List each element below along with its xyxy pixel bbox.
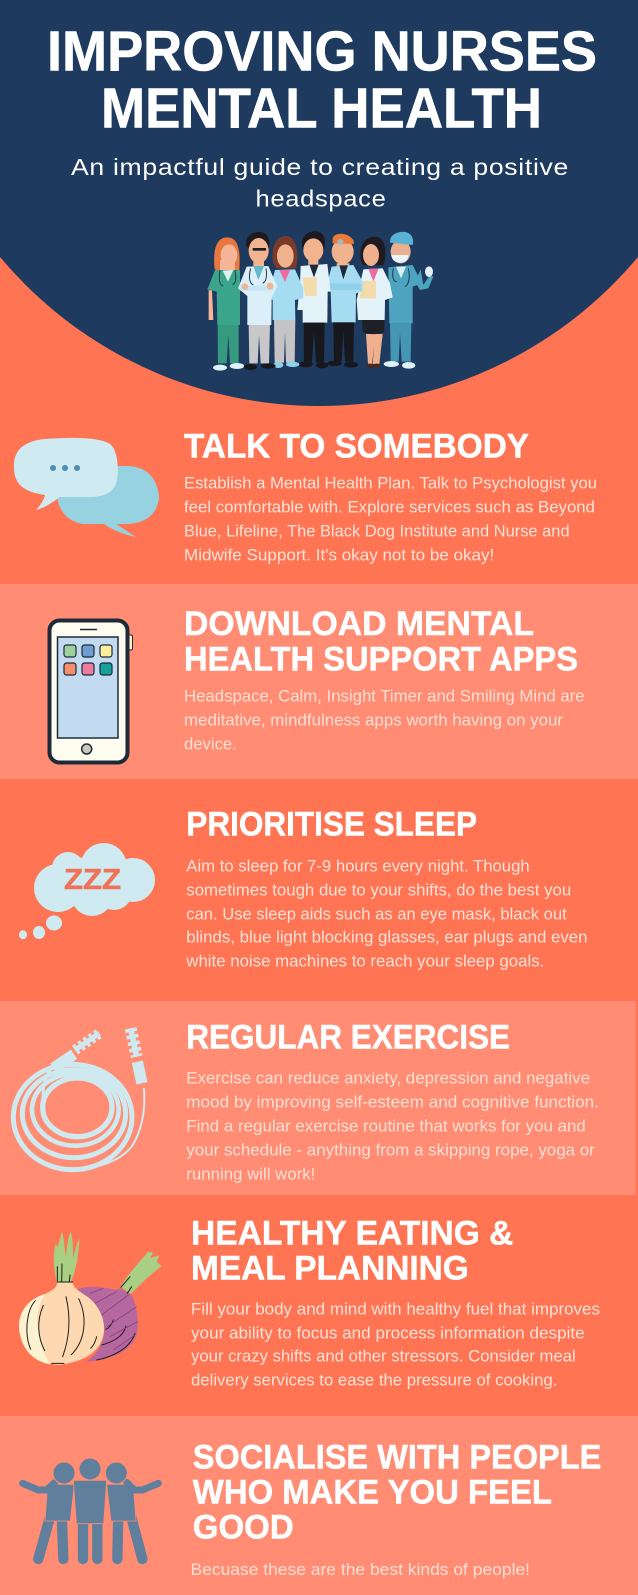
body text: Aim to sleep for 7-9 hours every night. Though	[186, 858, 530, 876]
body text: Establish a Mental Health Plan. Talk to Psychologist you	[184, 474, 597, 492]
panel: prioritise sleep	[19, 806, 588, 971]
icon detail: right handle	[131, 1028, 142, 1083]
icon detail: arms	[23, 1482, 158, 1490]
heading: HEALTH SUPPORT APPS	[184, 641, 578, 679]
icon detail: legs	[38, 1513, 142, 1559]
figure: woman with dark hair in skirt	[357, 237, 393, 368]
body text: your ability to focus and process information despite	[191, 1324, 585, 1342]
body text: Midwife Support. It's okay not to be okay!	[184, 546, 494, 564]
icon: three people embracing	[23, 1458, 158, 1559]
figure: man with head mirror	[326, 234, 363, 368]
heading	[184, 605, 578, 679]
body text: your crazy shifts and other stressors. Consider meal	[191, 1348, 576, 1366]
body text: blinds, blue light blocking glasses, ear plugs and even	[186, 929, 588, 947]
subtitle	[71, 154, 569, 212]
navy circle background	[0, 0, 638, 406]
body text: Fill your body and mind with healthy fuel that improves	[191, 1300, 600, 1318]
body text: Headspace, Calm, Insight Timer and Smiling Mind are	[184, 688, 585, 706]
panel: talk to somebody	[14, 428, 597, 564]
heading: TALK TO SOMEBODY	[184, 428, 529, 466]
body text: device.	[184, 735, 237, 753]
heading	[191, 1214, 513, 1287]
icon: onions	[19, 1232, 161, 1365]
icon: skipping rope	[13, 1028, 144, 1170]
body text: Exercise can reduce anxiety, depression and negative	[186, 1069, 590, 1087]
title: MENTAL HEALTH	[101, 77, 542, 140]
figure: man with clipboard	[297, 231, 331, 368]
icon detail: left handle	[53, 1033, 99, 1068]
title: IMPROVING NURSES	[47, 20, 597, 83]
body text: your schedule - anything from a skipping rope, yoga or	[186, 1141, 595, 1159]
illustration: group of nurses and doctors	[207, 231, 433, 371]
icon detail: typing dots	[50, 465, 80, 471]
body text: Find a regular exercise routine that works for you and	[186, 1117, 586, 1135]
icon detail: onion leaves	[54, 1232, 161, 1294]
heading: SOCIALISE WITH PEOPLE	[193, 1438, 601, 1476]
body text: can. Use sleep aids such as an eye mask, black out	[186, 905, 567, 923]
icon detail: torsos	[45, 1480, 136, 1524]
figure: woman with brown hair	[267, 236, 303, 368]
icon: thought cloud	[19, 843, 155, 939]
panel: download apps	[0, 584, 638, 779]
body text: feel comfortable with. Explore services such as Beyond	[184, 498, 595, 516]
figure: doctor with glasses and arms crossed	[238, 232, 277, 370]
body text: delivery services to ease the pressure of cooking.	[191, 1372, 557, 1390]
body text: Blue, Lifeline, The Black Dog Institute and Nurse and	[184, 522, 570, 540]
panel: socialise	[0, 1416, 638, 1595]
heading: DOWNLOAD MENTAL	[184, 605, 534, 643]
icon detail: thought dots	[19, 916, 62, 939]
heading: MEAL PLANNING	[191, 1249, 469, 1287]
panel: healthy eating	[19, 1214, 600, 1390]
title	[47, 20, 597, 140]
icon detail: app tiles	[64, 645, 112, 675]
panel background	[0, 1001, 636, 1195]
heading: PRIORITISE SLEEP	[186, 806, 477, 844]
icon detail: zzz letters: ZZZ	[64, 864, 121, 896]
body text	[191, 1300, 600, 1390]
icon detail: onion lines	[27, 1264, 135, 1363]
body text	[184, 688, 585, 753]
body text: running will work!	[186, 1165, 315, 1183]
heading: WHO MAKE YOU FEEL	[193, 1473, 552, 1511]
icon detail: heads	[53, 1458, 127, 1484]
heading: GOOD	[193, 1508, 294, 1546]
body text: sometimes tough due to your shifts, do the best you	[186, 881, 571, 899]
body text	[185, 858, 588, 971]
figure: nurse in green scrubs	[207, 237, 244, 371]
body text	[186, 1069, 599, 1183]
body text: mood by improving self-esteem and cognitive function.	[186, 1093, 599, 1111]
body text: Becuase these are the best kinds of people!	[190, 1561, 530, 1579]
icon: smartphone	[50, 620, 132, 762]
panel: regular exercise	[0, 1001, 636, 1195]
subtitle: An impactful guide to creating a positive	[71, 154, 569, 180]
icon: speech bubbles	[14, 438, 159, 537]
body text: meditative, mindfulness apps worth having on your	[184, 712, 564, 730]
panel background	[0, 1416, 638, 1595]
heading: REGULAR EXERCISE	[186, 1018, 510, 1056]
subtitle: headspace	[256, 186, 386, 212]
body text: white noise machines to reach your sleep goals.	[185, 953, 544, 971]
heading	[193, 1438, 601, 1546]
figure: surgeon with mask and cap	[384, 232, 433, 369]
body text	[184, 474, 597, 564]
panel background	[0, 584, 638, 779]
header panel	[0, 0, 638, 406]
heading: HEALTHY EATING &	[191, 1214, 513, 1252]
